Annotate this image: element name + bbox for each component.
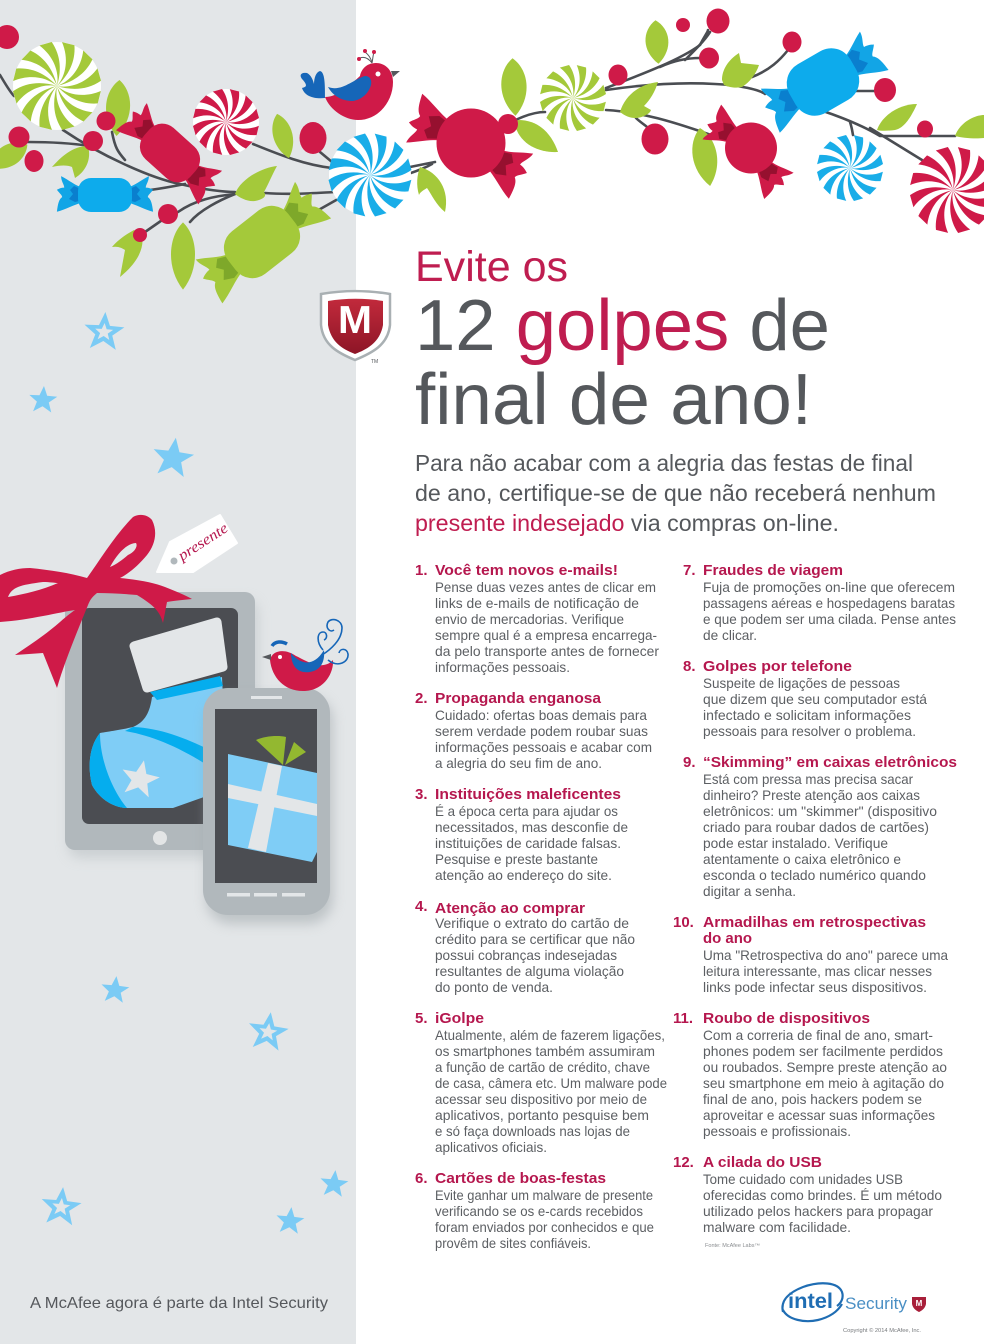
gift tag: presente <box>175 520 231 565</box>
tip 12: utilizado pelos hackers para propagar <box>703 1204 933 1219</box>
tip 12 <box>673 1154 942 1235</box>
tip 5: iGolpe <box>435 1010 484 1027</box>
tip 7: de clicar. <box>703 628 757 643</box>
tip 9 <box>683 754 957 899</box>
star outline <box>83 311 125 350</box>
icon: small bird on phone <box>262 620 348 691</box>
gray side panel <box>0 0 356 1344</box>
star outline middle <box>246 1009 291 1052</box>
tip 11: phones podem ser facilmente perdidos <box>703 1044 943 1059</box>
tablet <box>65 592 258 858</box>
tip 11: ou roubados. Sempre preste atenção ao <box>703 1060 947 1075</box>
tip 12: oferecidas como brindes. É um método <box>703 1187 942 1203</box>
tip 1: informações pessoais. <box>435 660 570 675</box>
tip 10: Armadilhas em retrospectivas <box>703 914 926 931</box>
Intel Security logo: Security <box>845 1294 907 1313</box>
branches <box>0 30 955 232</box>
tip 4: crédito para se certificar que não <box>435 932 635 947</box>
tip 7: e que podem ser uma cilada. Pense antes <box>703 612 956 627</box>
tip 2: 2. <box>415 690 428 707</box>
tip 1: Pense duas vezes antes de clicar em <box>435 580 656 595</box>
tip 6: 6. <box>415 1170 428 1187</box>
tip 12: malware com facilidade. <box>703 1220 851 1235</box>
stocking <box>90 622 225 808</box>
tip 2 <box>415 690 652 771</box>
tip 2: informações pessoais e acabar com <box>435 740 652 755</box>
tip 5: e só faça downloads nas lojas de <box>435 1124 630 1139</box>
tip 1: envio de mercadorias. Verifique <box>435 612 624 627</box>
tip 3: 3. <box>415 786 428 803</box>
tip 6: Cartões de boas-festas <box>435 1170 606 1187</box>
intro paragraph: presente indesejado via compras on-line. <box>415 510 839 536</box>
tip 1 <box>415 562 659 675</box>
tip 6: foram enviados por conhecidos e que <box>435 1220 654 1235</box>
tip 9: dinheiro? Preste atenção aos caixas <box>703 788 920 803</box>
tip 10: 10. <box>673 914 694 931</box>
tip 9: pode estar instalado. Verifique <box>703 836 888 851</box>
tip 11: final de ano, pois hackers podem se <box>703 1092 922 1107</box>
tip 12: 12. <box>673 1154 694 1171</box>
tip 3: necessitados, mas desconfie de <box>435 820 628 835</box>
gift on phone screen <box>228 736 317 862</box>
tip 11: 11. <box>673 1010 693 1027</box>
tip 6: provêm de sites confiáveis. <box>435 1236 591 1251</box>
tip 9: esconda o teclado numérico quando <box>703 868 926 883</box>
tip 4: Verifique o extrato do cartão de <box>435 916 629 931</box>
tip 2: serem verdade podem roubar suas <box>435 724 648 739</box>
tip list column 1 <box>415 562 667 1251</box>
tip 5: 5. <box>415 1010 428 1027</box>
intro paragraph <box>415 450 936 536</box>
tip 5 <box>415 1010 667 1155</box>
tip 12: A cilada do USB <box>703 1154 822 1171</box>
garland of candies and berries <box>0 8 984 306</box>
tip 12: Tome cuidado com unidades USB <box>703 1172 903 1187</box>
tip 3 <box>415 786 628 883</box>
tip 4: possui cobranças indesejadas <box>435 948 617 963</box>
intro paragraph: Para não acabar com a alegria das festas de final <box>415 450 913 476</box>
tip 6 <box>415 1170 654 1251</box>
footer note: McAfee part of Intel Security: A McAfee agora é parte da Intel Security <box>30 1295 328 1312</box>
McAfee shield logo <box>321 291 390 365</box>
tip 3: Instituições maleficentes <box>435 786 621 803</box>
star solid small <box>100 975 130 1003</box>
illustration: tablet and phone with gifts <box>0 515 348 924</box>
tip 9: 9. <box>683 754 696 771</box>
tip 5: aplicativos, portanto pesquise bem <box>435 1108 649 1123</box>
tip 8: infectado e solicitam informações <box>703 708 911 723</box>
wrapped candies <box>57 26 891 306</box>
phone <box>203 688 333 924</box>
tip 5: Atualmente, além de fazerem ligações, <box>435 1028 665 1043</box>
tip 9: Está com pressa mas precisa sacar <box>703 772 913 787</box>
tip 9: “Skimming” em caixas eletrônicos <box>703 754 957 771</box>
tip 2: Propaganda enganosa <box>435 690 602 707</box>
tip 5: a função de cartão de crédito, chave <box>435 1060 650 1075</box>
tip 3: atenção ao endereço do site. <box>435 868 612 883</box>
Intel Security logo: intel <box>788 1290 833 1313</box>
tip 10: links pode infectar seus dispositivos. <box>703 980 927 995</box>
title: 12 golpes de <box>415 286 830 366</box>
Intel Security logo <box>782 1283 926 1321</box>
star solid large <box>150 435 196 478</box>
tip 8: Golpes por telefone <box>703 658 852 675</box>
gift tag <box>157 515 237 572</box>
tip 10: do ano <box>703 930 752 947</box>
tip 5: aplicativos oficiais. <box>435 1140 547 1155</box>
star solid <box>28 385 58 413</box>
tip 11: pessoais e profissionais. <box>703 1124 851 1139</box>
tip 1: links de e-mails de notificação de <box>435 596 639 611</box>
tip 10 <box>673 914 948 995</box>
tip 10: Uma "Retrospectiva do ano" parece uma <box>703 948 948 963</box>
star solid right <box>319 1169 349 1197</box>
tip 7: passagens aéreas e hospedagens baratas <box>703 596 955 611</box>
berries <box>0 8 933 242</box>
tip 8 <box>683 658 927 739</box>
tip 4: Atenção ao comprar <box>435 900 585 917</box>
tip 11: aproveitar e acessar suas informações <box>703 1108 935 1123</box>
tip 4: 4. <box>415 898 428 915</box>
title: final de ano! <box>415 360 812 440</box>
tip 8: que dizem que seu computador está <box>703 692 927 707</box>
tip 5: acessar seu dispositivo por meio de <box>435 1092 647 1107</box>
tip 5: de casa, câmera etc. Um malware pode <box>435 1076 667 1091</box>
tip list column 2 <box>673 562 957 1249</box>
tip 7 <box>683 562 956 643</box>
tip 1: da pelo transporte antes de fornecer <box>435 644 659 659</box>
tip 1: sempre qual é a empresa encarrega- <box>435 628 657 643</box>
title <box>415 243 830 440</box>
tip 3: É a época certa para ajudar os <box>435 803 618 819</box>
tip 3: instituições de caridade falsas. <box>435 836 621 851</box>
tip 9: criado para roubar dados de cartões) <box>703 820 929 835</box>
tip 7: Fuja de promoções on-line que oferecem <box>703 580 955 595</box>
tip 10: leitura interessante, mas clicar nesses <box>703 964 932 979</box>
tip 4: resultantes de alguma violação <box>435 964 624 979</box>
stars <box>28 311 349 1234</box>
tip 8: 8. <box>683 658 696 675</box>
tip 1: 1. <box>415 562 428 579</box>
tip 11: seu smartphone em meio à agitação do <box>703 1076 944 1091</box>
tip 9: eletrônicos: um "skimmer" (dispositivo <box>703 804 937 819</box>
tip 9: digitar a senha. <box>703 884 796 899</box>
tip 2: Cuidado: ofertas boas demais para <box>435 708 647 723</box>
leaves <box>0 19 984 290</box>
ribbon bow <box>0 515 192 688</box>
tip 6: Evite ganhar um malware de presente <box>435 1188 653 1203</box>
intro paragraph: de ano, certifique-se de que não receberá nenhum <box>415 480 936 506</box>
McAfee shield logo: TM <box>371 359 378 365</box>
McAfee shield logo: M <box>338 299 372 342</box>
copyright: Copyright © 2014 McAfee, Inc. <box>843 1327 921 1334</box>
tip 6: verificando se os e-cards recebidos <box>435 1204 643 1219</box>
title: Evite os <box>415 243 568 291</box>
tip 4 <box>415 898 635 995</box>
tip 5: os smartphones também assumiram <box>435 1044 655 1059</box>
tip 2: a alegria do seu fim de ano. <box>435 756 602 771</box>
source note: Fonte: McAfee Labs™ <box>705 1243 760 1249</box>
tip 11 <box>673 1010 947 1139</box>
tip 8: Suspeite de ligações de pessoas <box>703 676 900 691</box>
tip 9: atentamente o caixa eletrônico e <box>703 852 901 867</box>
Intel Security logo: M <box>916 1299 923 1308</box>
tip 4: do ponto de venda. <box>435 980 553 995</box>
icon: bird on garland <box>301 49 400 120</box>
tip 8: pessoais para resolver o problema. <box>703 724 916 739</box>
tip 1: Você tem novos e-mails! <box>435 562 618 579</box>
star solid bottom <box>275 1206 305 1234</box>
swirl candies <box>10 39 984 236</box>
tip 7: Fraudes de viagem <box>703 562 843 579</box>
tip 7: 7. <box>683 562 696 579</box>
tip 3: Pesquise e preste bastante <box>435 852 598 867</box>
tip 11: Com a correria de final de ano, smart- <box>703 1028 933 1043</box>
tip 11: Roubo de dispositivos <box>703 1010 870 1027</box>
star outline bottom <box>39 1185 83 1226</box>
